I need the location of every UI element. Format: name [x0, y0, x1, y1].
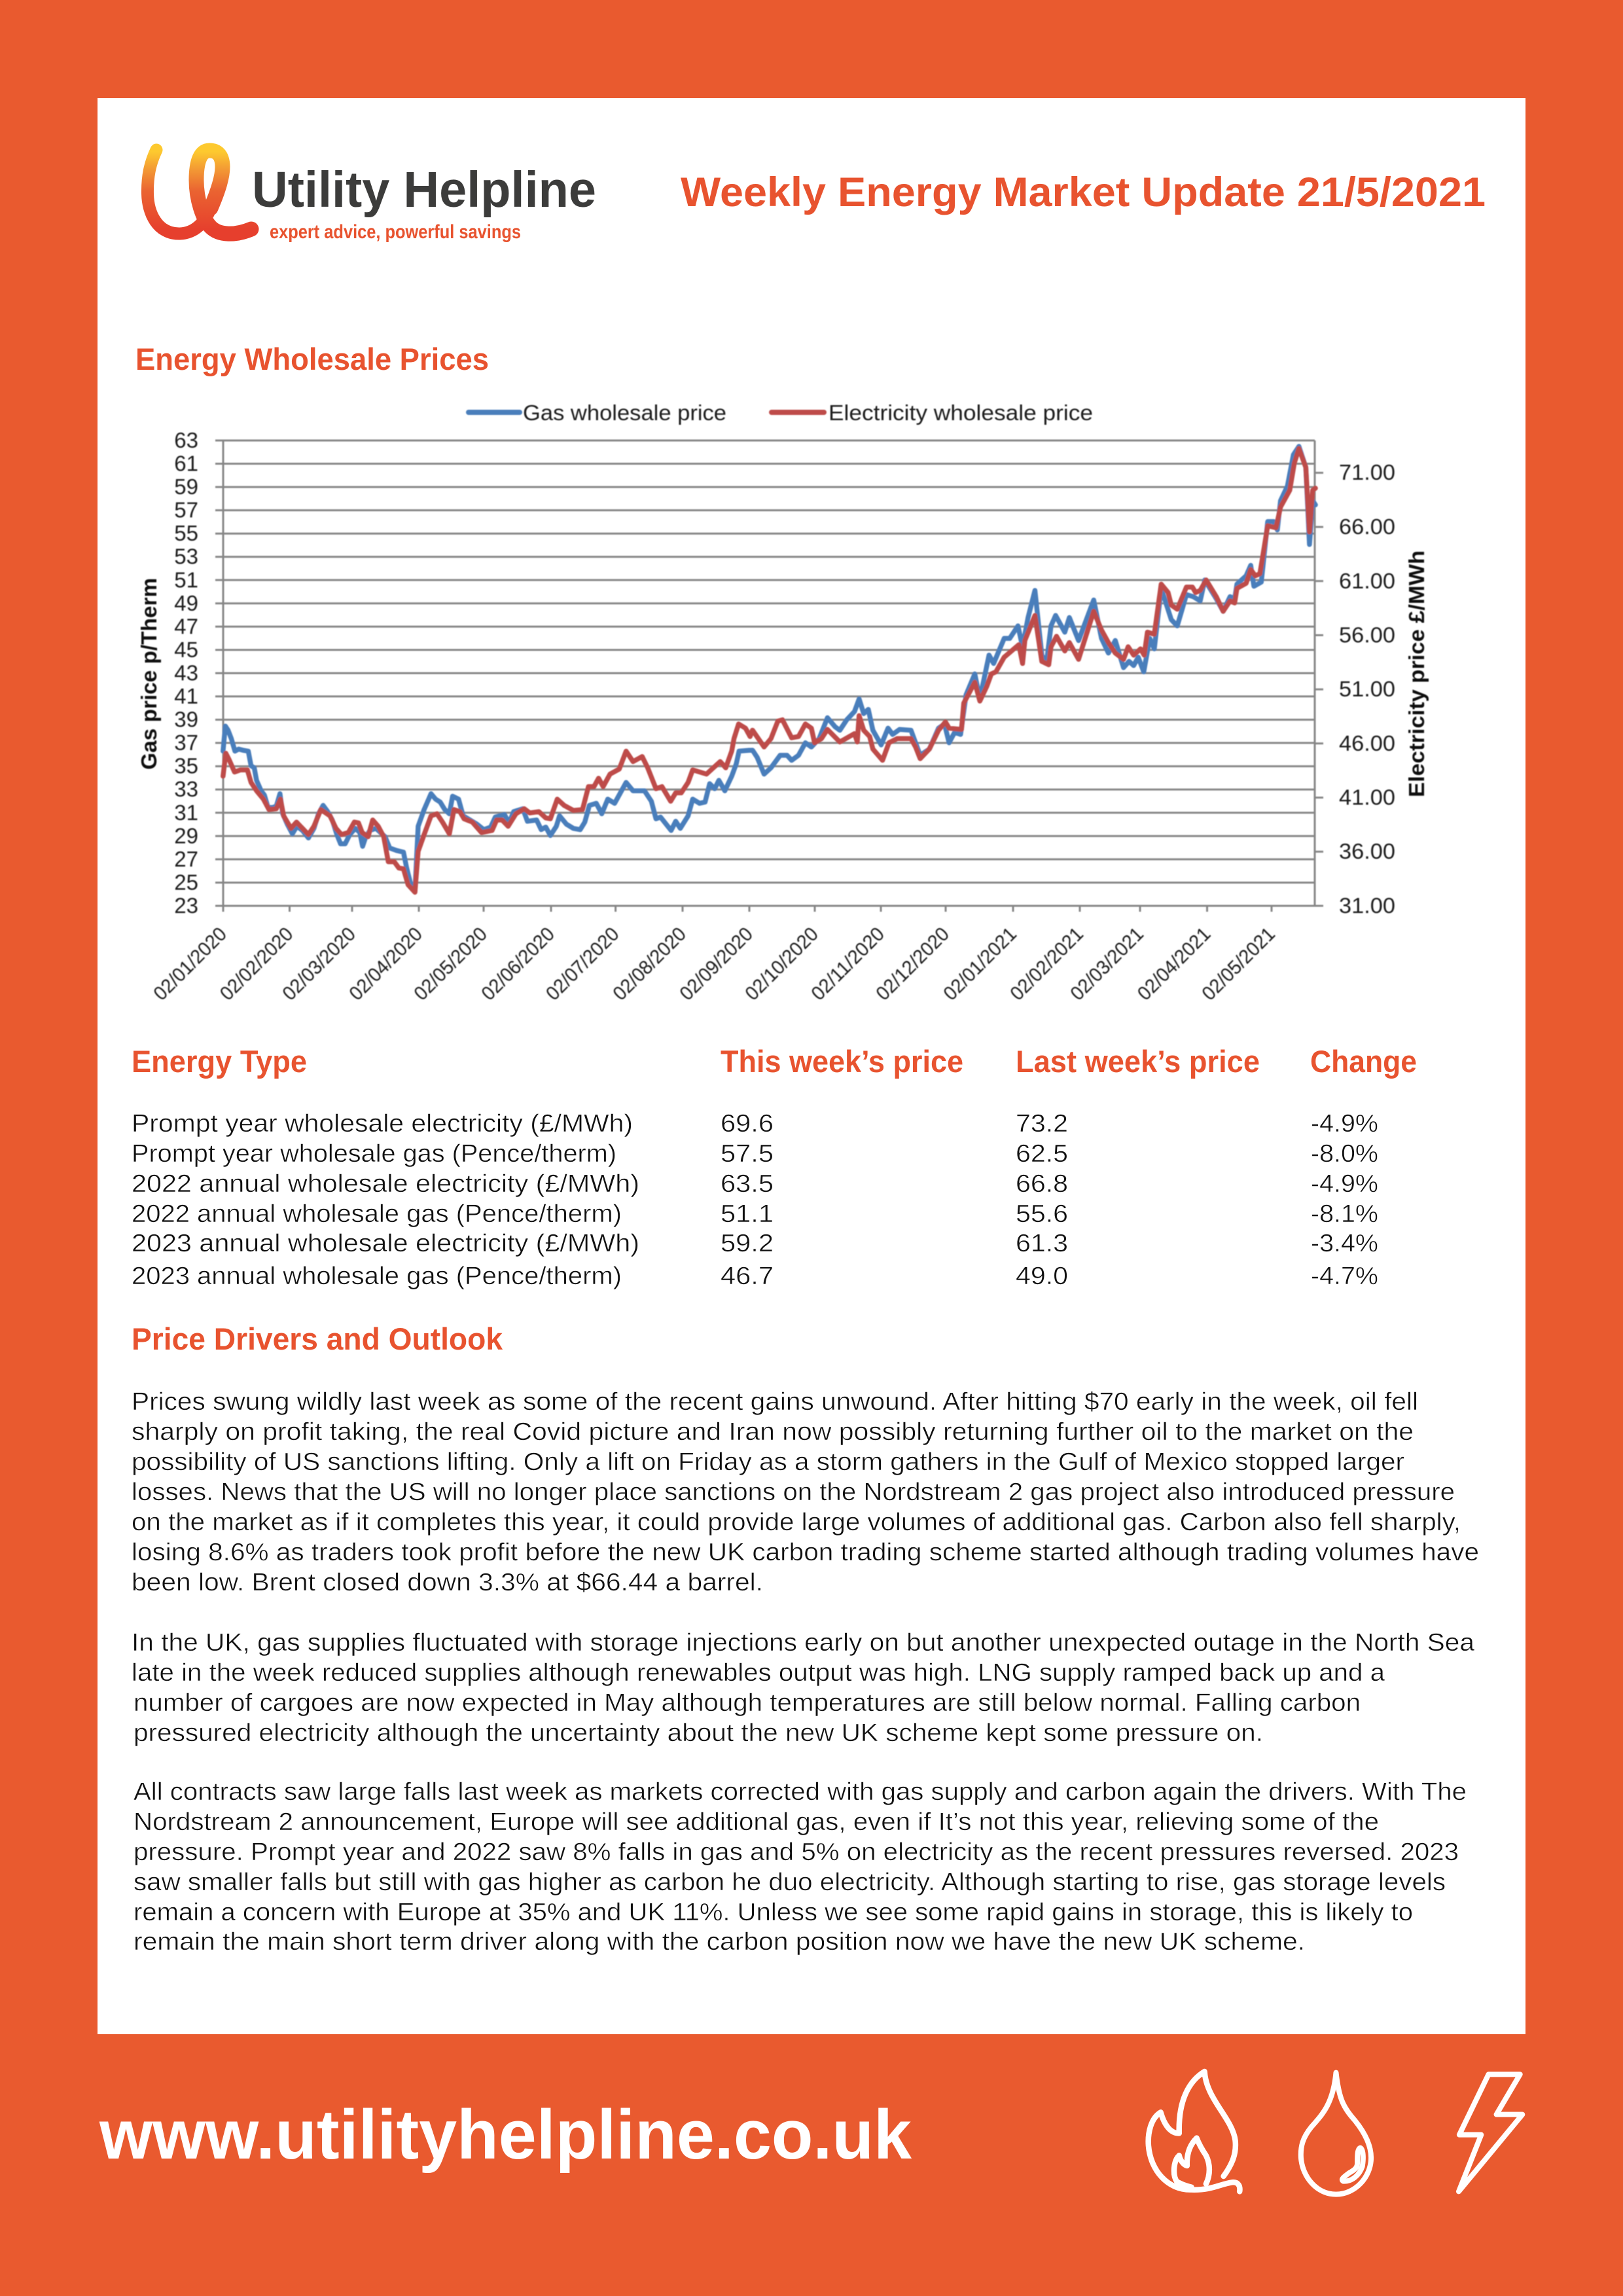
line chart: gas and electricity wholesale prices [137, 401, 1429, 1005]
text block: contracts paragraph: remain a concern with Europe at 35% and UK 11%. Unless we see some rapid gains in storage, this is likely to [134, 1899, 1413, 1926]
left axis labels: gas price: 31 [174, 800, 198, 825]
table row: 2023 gas: 2023 annual wholesale gas (Pence/therm) [132, 1263, 622, 1290]
table row: 2023 electricity [132, 1230, 1378, 1257]
x axis date labels: 02/12/2020 [872, 924, 954, 1005]
footer website address: www.utilityhelpline.co.uk [99, 2095, 912, 2174]
icon: logo swoosh [147, 150, 251, 234]
right axis labels: electricity price: 71.00 [1339, 460, 1395, 484]
icon: lightning bolt [1459, 2074, 1522, 2191]
left axis labels: gas price: 53 [174, 545, 198, 569]
text block: market paragraph: losses. News that the US will no longer place sanctions on the Nordstream 2 gas project also introduced pressure [132, 1479, 1455, 1506]
table row: 2023 electricity: 59.2 [721, 1230, 774, 1257]
table: energy prices [132, 1044, 1417, 1290]
x axis date labels: 02/05/2021 [1198, 924, 1279, 1005]
left axis labels: gas price: 59 [174, 475, 198, 499]
x axis date labels: 02/01/2020 [149, 924, 231, 1005]
table row: prompt year electricity: -4.9% [1311, 1110, 1378, 1138]
table row: prompt year gas: -8.0% [1311, 1140, 1378, 1168]
electricity price line [223, 448, 1315, 892]
logo wordmark: Utility Helpline [252, 162, 596, 218]
chart legend: Gas wholesale price [523, 401, 726, 425]
x axis date labels: 02/02/2021 [1006, 924, 1088, 1005]
right axis labels: electricity price: 61.00 [1339, 569, 1395, 593]
text block: UK paragraph: In the UK, gas supplies fluctuated with storage injections early on but another unexpected outage in the North Sea [132, 1629, 1475, 1657]
left axis labels: gas price: 27 [174, 847, 198, 871]
text block: UK paragraph: late in the week reduced supplies although renewables output was high. LNG supply ramped back up and a [132, 1659, 1385, 1687]
table row: 2022 gas: 51.1 [721, 1200, 774, 1228]
table header: Last week’s price [1016, 1044, 1260, 1079]
table row: prompt year gas: 57.5 [721, 1140, 774, 1168]
text block: contracts paragraph: pressure. Prompt year and 2022 saw 8% falls in gas and 5% on electricity as the recent pressures reversed. 2023 [134, 1839, 1459, 1866]
text block: contracts paragraph: remain the main short term driver along with the carbon position now we have the new UK scheme. [134, 1928, 1305, 1956]
left axis labels: gas price: 41 [174, 684, 198, 708]
table row: 2022 gas: 2022 annual wholesale gas (Pence/therm) [132, 1200, 622, 1228]
x axis date labels: 02/06/2020 [477, 924, 559, 1005]
table row: prompt year gas: Prompt year wholesale gas (Pence/therm) [132, 1140, 616, 1168]
x axis date labels: 02/02/2020 [216, 924, 297, 1005]
text block: market paragraph: losing 8.6% as traders took profit before the new UK carbon trading scheme started although trading volumes have [132, 1539, 1479, 1566]
table row: 2023 electricity: -3.4% [1311, 1230, 1378, 1257]
table row: 2023 gas [132, 1263, 1378, 1290]
left axis labels: gas price [174, 428, 198, 918]
heading: Energy Wholesale Prices: Energy Wholesale Prices [135, 342, 489, 376]
left axis title: Gas price p/Therm [137, 578, 161, 770]
left axis labels: gas price: 51 [174, 567, 198, 592]
icon: water drop [1301, 2073, 1371, 2195]
text block: UK paragraph: number of cargoes are now expected in May although temperatures are still below normal. Falling carbon [134, 1689, 1361, 1717]
right axis title: Electricity price £/MWh [1404, 550, 1429, 797]
table row: 2023 gas: 49.0 [1016, 1263, 1068, 1290]
left axis labels: gas price: 43 [174, 661, 198, 685]
chart legend [469, 401, 1093, 425]
x axis date labels: 02/04/2020 [345, 924, 427, 1005]
x axis date labels: 02/03/2020 [278, 924, 360, 1005]
x axis date labels: 02/10/2020 [741, 924, 823, 1005]
left axis labels: gas price: 45 [174, 637, 198, 662]
table row: prompt year electricity [132, 1110, 1378, 1138]
table row: 2023 gas: -4.7% [1311, 1263, 1378, 1290]
left axis labels: gas price: 47 [174, 614, 198, 638]
table row: 2023 electricity: 61.3 [1016, 1230, 1068, 1257]
table row: 2022 gas [132, 1200, 1378, 1228]
x axis date labels: 02/08/2020 [609, 924, 690, 1005]
logo tagline: expert advice, powerful savings [270, 221, 521, 243]
text block: contracts paragraph [134, 1778, 1467, 1956]
text block: market paragraph [132, 1388, 1479, 1596]
x axis date labels: 02/05/2020 [410, 924, 491, 1005]
icon: flame [1149, 2072, 1240, 2191]
text block: market paragraph: Prices swung wildly last week as some of the recent gains unwound. After hitting $70 early in the week, oil fell [132, 1388, 1418, 1416]
table row: 2023 electricity: 2023 annual wholesale electricity (£/MWh) [132, 1230, 639, 1257]
right axis labels: electricity price: 51.00 [1339, 677, 1395, 701]
left axis labels: gas price: 23 [174, 893, 198, 918]
left axis labels: gas price: 57 [174, 498, 198, 522]
x axis date labels: 02/07/2020 [542, 924, 624, 1005]
left axis labels: gas price: 63 [174, 428, 198, 452]
left axis labels: gas price: 33 [174, 777, 198, 801]
table row: 2022 gas: 55.6 [1016, 1200, 1068, 1228]
text block: market paragraph: been low. Brent closed down 3.3% at $66.44 a barrel. [132, 1569, 763, 1596]
table header: This week’s price [721, 1044, 963, 1079]
table row: 2022 gas: -8.1% [1311, 1200, 1378, 1228]
right axis labels: electricity price: 36.00 [1339, 839, 1395, 863]
x axis date labels: 02/01/2021 [939, 924, 1021, 1005]
right axis labels: electricity price: 41.00 [1339, 785, 1395, 809]
table row: prompt year gas: 62.5 [1016, 1140, 1068, 1168]
table header: Change [1310, 1044, 1417, 1079]
title: Weekly Energy Market Update 21/5/2021 [681, 170, 1486, 215]
table row: 2022 electricity: -4.9% [1311, 1170, 1378, 1198]
text block: market paragraph: sharply on profit taking, the real Covid picture and Iran now possibly returning further oil to the market on the [132, 1418, 1414, 1446]
left axis labels: gas price: 37 [174, 730, 198, 755]
x axis date labels: 02/04/2021 [1133, 924, 1215, 1005]
x axis date labels: 02/09/2020 [675, 924, 757, 1005]
left axis labels: gas price: 39 [174, 708, 198, 732]
right axis labels: electricity price: 56.00 [1339, 623, 1395, 647]
table row: 2022 electricity: 63.5 [721, 1170, 774, 1198]
text block: contracts paragraph: All contracts saw large falls last week as markets corrected with gas supply and carbon again the drivers. With The [134, 1778, 1467, 1806]
right axis labels: electricity price: 66.00 [1339, 514, 1395, 539]
white content panel [98, 98, 1525, 2034]
gas price line [223, 446, 1315, 891]
left axis labels: gas price: 35 [174, 754, 198, 778]
right axis labels: electricity price: 31.00 [1339, 893, 1395, 918]
table row: prompt year electricity: 69.6 [721, 1110, 774, 1138]
table row: prompt year gas [132, 1140, 1378, 1168]
table row: 2023 gas: 46.7 [721, 1263, 774, 1290]
table header: Energy Type [132, 1044, 307, 1079]
table row: 2022 electricity: 2022 annual wholesale electricity (£/MWh) [132, 1170, 639, 1198]
table row: prompt year electricity: Prompt year wholesale electricity (£/MWh) [132, 1110, 633, 1138]
x axis date labels: 02/03/2021 [1066, 924, 1148, 1005]
left axis labels: gas price: 61 [174, 452, 198, 475]
right axis labels: electricity price [1339, 460, 1395, 918]
table row: prompt year electricity: 73.2 [1016, 1110, 1068, 1138]
heading: Price Drivers and Outlook: Price Drivers and Outlook [132, 1321, 503, 1356]
text block: UK paragraph: pressured electricity although the uncertainty about the new UK scheme kept some pressure on. [134, 1719, 1263, 1747]
text block: UK paragraph [132, 1629, 1475, 1747]
logo: Utility Helpline [147, 150, 596, 243]
left axis labels: gas price: 55 [174, 521, 198, 545]
table header [132, 1044, 1417, 1079]
table row: 2022 electricity [132, 1170, 1378, 1198]
left axis labels: gas price: 29 [174, 823, 198, 848]
x axis date labels: 02/11/2020 [807, 924, 889, 1005]
text block: market paragraph: on the market as if it completes this year, it could provide large volumes of additional gas. Carbon also fell sharply, [132, 1509, 1461, 1536]
x axis date labels [149, 924, 1279, 1005]
left axis labels: gas price: 25 [174, 870, 198, 894]
left axis labels: gas price: 49 [174, 591, 198, 615]
text block: contracts paragraph: saw smaller falls but still with gas higher as carbon he duo electricity. Although starting to rise, gas storage levels [134, 1869, 1446, 1896]
chart legend: Electricity wholesale price [829, 401, 1093, 425]
right axis labels: electricity price: 46.00 [1339, 731, 1395, 755]
table row: 2022 electricity: 66.8 [1016, 1170, 1068, 1198]
text block: contracts paragraph: Nordstream 2 announcement, Europe will see additional gas, even if It’s not this year, relieving some of the [134, 1808, 1379, 1836]
text block: market paragraph: possibility of US sanctions lifting. Only a lift on Friday as a storm gathers in the Gulf of Mexico stopped larger [132, 1448, 1404, 1476]
